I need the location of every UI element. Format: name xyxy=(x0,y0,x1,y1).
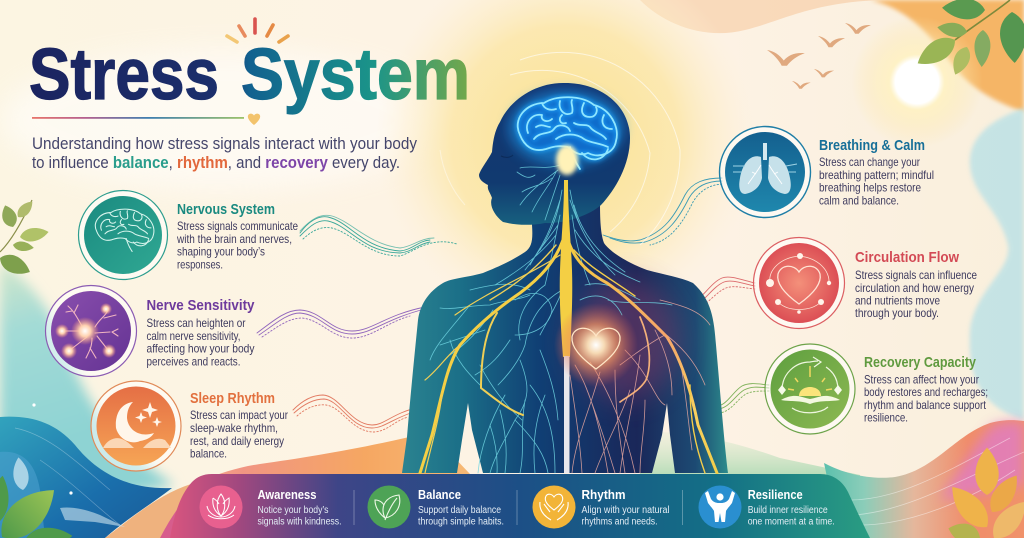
leaves: left sprig xyxy=(0,198,50,280)
heading: Recovery Capacity xyxy=(864,354,977,371)
body text: circulation and how energy xyxy=(855,281,974,295)
leaves: bottom left xyxy=(0,456,73,538)
leaves: top right branch xyxy=(912,0,1024,78)
item text: Rhythm xyxy=(582,487,626,502)
fine nerves xyxy=(430,165,672,473)
icon: lotus xyxy=(200,486,242,528)
title text: System xyxy=(241,35,470,115)
decorative hills behind figure xyxy=(120,420,1024,538)
body text: responses. xyxy=(177,258,223,272)
body text: sleep-wake rhythm, xyxy=(190,421,278,435)
brain glow xyxy=(508,90,624,166)
body text: resilience. xyxy=(864,410,908,424)
icon: raised arms figure xyxy=(698,486,742,528)
wave: circulation xyxy=(660,277,755,310)
item text: through simple habits. xyxy=(418,516,504,528)
body text: Stress signals can influence xyxy=(855,268,977,282)
heading: Nervous System xyxy=(177,201,275,218)
halo rings xyxy=(440,52,680,245)
panel: recovery capacity xyxy=(765,344,988,434)
connector waves xyxy=(257,178,769,432)
heading: Breathing & Calm xyxy=(819,137,925,154)
head silhouette xyxy=(479,83,630,225)
subtitle: Understanding how stress signals interact with your body xyxy=(32,134,418,153)
sun xyxy=(851,16,983,148)
body text: shaping your body’s xyxy=(177,244,265,258)
icon: leaf xyxy=(368,486,410,528)
body text: calm nerve sensitivity, xyxy=(146,329,240,343)
icon: sunrise cycle xyxy=(765,344,855,434)
panel: circulation flow xyxy=(754,238,977,328)
body silhouette xyxy=(402,197,728,473)
icon: heart in hands xyxy=(532,486,576,528)
subtitle: to influence balance, rhythm, and recovery every day. xyxy=(32,153,408,172)
title rays xyxy=(227,19,288,42)
item: rhythm xyxy=(532,486,670,528)
body text: rest, and daily energy xyxy=(190,434,284,448)
heading: Nerve Sensitivity xyxy=(146,297,255,314)
body text: Stress can impact your xyxy=(190,408,288,422)
leaves: bottom right xyxy=(943,448,1024,538)
item text: signals with kindness. xyxy=(258,516,342,528)
title text: Stress xyxy=(29,35,219,115)
body text: Stress signals communicate xyxy=(177,219,298,233)
item text: Support daily balance xyxy=(418,505,501,516)
wave: breathing xyxy=(603,178,722,245)
item text: rhythms and needs. xyxy=(582,516,658,528)
heading: Sleep Rhythm xyxy=(190,390,275,407)
body text: Stress can change your xyxy=(819,155,920,169)
main nerve: left branch xyxy=(425,245,560,473)
bottom banner xyxy=(170,474,870,538)
item text: Build inner resilience xyxy=(748,505,828,516)
title underline with heart xyxy=(32,114,260,125)
item text: Balance xyxy=(418,487,461,502)
body text: affecting how your body xyxy=(146,342,254,356)
item: resilience xyxy=(698,486,835,528)
icon: neuron xyxy=(46,286,136,376)
brainstem glow xyxy=(556,145,578,175)
heart glow xyxy=(554,303,638,387)
main nerve: right branch xyxy=(574,250,705,473)
item text: Awareness xyxy=(258,487,316,502)
title block xyxy=(29,19,470,115)
icon: heart xyxy=(754,238,844,328)
body text: balance. xyxy=(190,446,227,460)
birds xyxy=(767,23,871,89)
closed eye xyxy=(501,155,513,157)
item text: one moment at a time. xyxy=(748,516,835,528)
icon: brain xyxy=(78,190,168,280)
glowing brain xyxy=(518,97,617,169)
heading: Circulation Flow xyxy=(855,249,959,266)
spine: white xyxy=(564,356,570,473)
main nerve: left arm xyxy=(420,240,563,473)
item: balance xyxy=(368,486,504,528)
chest tint xyxy=(570,280,680,400)
body text: rhythm and balance support xyxy=(864,398,987,412)
banner background xyxy=(170,474,870,538)
panel: breathing and calm xyxy=(720,126,934,218)
icon: lungs xyxy=(720,126,810,218)
body text: body restores and recharges; xyxy=(864,385,988,399)
heart outline xyxy=(572,328,620,369)
spine: yellow xyxy=(560,180,572,357)
main nerve: right arm xyxy=(568,240,717,473)
body text: perceives and reacts. xyxy=(146,354,240,368)
panel: sleep rhythm xyxy=(91,381,288,471)
body text: and nutrients move xyxy=(855,294,940,308)
item text: Align with your natural xyxy=(582,505,670,516)
item text: Notice your body’s xyxy=(258,505,329,516)
item text: Resilience xyxy=(748,487,803,502)
blue wave bottom left xyxy=(0,403,205,538)
body text: through your body. xyxy=(855,306,939,320)
body text: calm and balance. xyxy=(819,194,899,208)
wave: nerve sensitivity xyxy=(257,307,425,338)
body text: breathing pattern; mindful xyxy=(819,168,934,182)
body text: Stress can heighten or xyxy=(146,316,246,330)
item: awareness xyxy=(200,486,342,528)
body text: breathing helps restore xyxy=(819,180,921,194)
wave: nervous system xyxy=(300,215,457,256)
wave: recovery xyxy=(688,384,769,413)
panel: nervous system xyxy=(78,190,298,280)
icon: moon xyxy=(91,381,181,471)
human figure xyxy=(402,83,728,473)
body text: with the brain and nerves, xyxy=(176,232,292,246)
warm fine nerves xyxy=(570,300,710,473)
body text: Stress can affect how your xyxy=(864,372,979,386)
panel: nerve sensitivity xyxy=(46,286,255,376)
wave: sleep rhythm xyxy=(293,395,420,432)
